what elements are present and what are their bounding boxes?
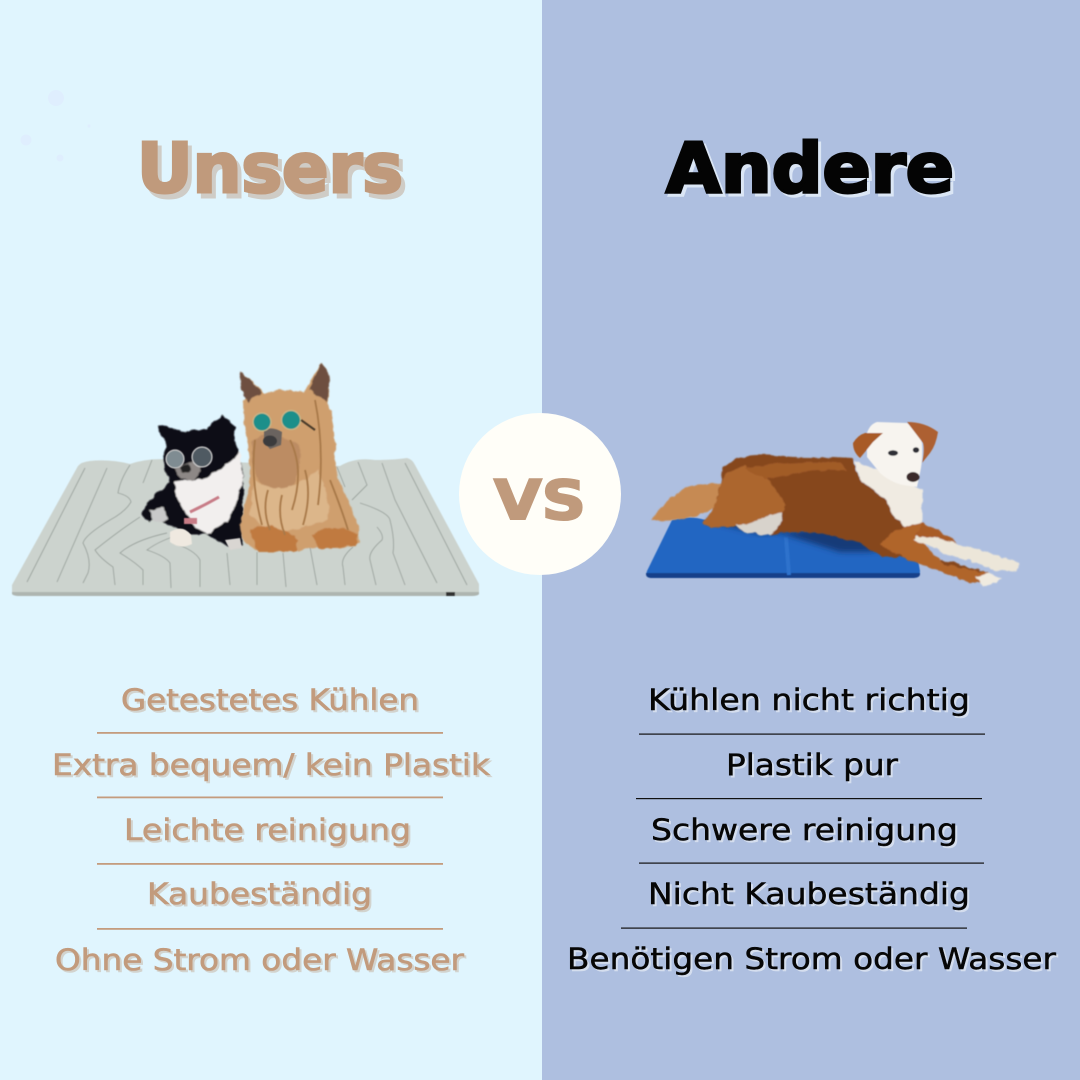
icon: VS circle bbox=[459, 413, 621, 575]
item: Benötigen Strom oder Wasser: Benötigen Strom oder Wasser bbox=[567, 942, 1056, 976]
item: Extra bequem / kein Plastik: Extra bequem/ kein Plastik bbox=[52, 748, 490, 782]
list: Andere drawbacks bbox=[567, 683, 1058, 978]
illustration: blue cooling mat with brown dog bbox=[646, 422, 1020, 587]
chihuahua details: sunglasses, collar and paws bbox=[166, 447, 242, 550]
brown dog head bbox=[853, 422, 938, 487]
item: Kühlen nicht richtig: Kühlen nicht richtig bbox=[648, 683, 970, 717]
item: Leichte reinigung: Leichte reinigung bbox=[126, 815, 413, 849]
item: Kaubeständig: Kaubeständig bbox=[149, 879, 374, 913]
dog: yorkshire terrier bbox=[239, 363, 359, 552]
title: Andere: Andere bbox=[666, 129, 954, 209]
blue gel mat bbox=[646, 515, 920, 578]
panel: right background bbox=[542, 0, 1080, 1080]
item: Kaubeständig: Kaubeständig bbox=[147, 877, 372, 911]
item: Benötigen Strom oder Wasser: Benötigen Strom oder Wasser bbox=[569, 944, 1058, 978]
item: Ohne Strom oder Wasser: Ohne Strom oder Wasser bbox=[57, 945, 466, 979]
item: Kühlen nicht richtig: Kühlen nicht richtig bbox=[650, 685, 972, 719]
item: Extra bequem / kein Plastik: Extra bequem/ kein Plastik bbox=[54, 750, 492, 784]
item: Nicht Kaubeständig: Nicht Kaubeständig bbox=[650, 879, 972, 913]
item: Leichte reinigung: Leichte reinigung bbox=[124, 813, 411, 847]
panel: left background bbox=[0, 0, 542, 1080]
title: Unsers: Unsers bbox=[137, 129, 403, 209]
item: Getestetes Kühlen: Getestetes Kühlen bbox=[121, 683, 419, 717]
brown dog bbox=[650, 454, 1020, 587]
title: Unsers: Unsers bbox=[141, 134, 407, 214]
item: Getestetes Kühlen: Getestetes Kühlen bbox=[123, 685, 421, 719]
illustration: grey cooling mat with two dogs bbox=[12, 363, 479, 596]
decorative bubbles bbox=[20, 90, 91, 162]
item: Schwere reinigung: Schwere reinigung bbox=[653, 815, 960, 849]
item: Ohne Strom oder Wasser: Ohne Strom oder Wasser bbox=[55, 943, 464, 977]
item: Plastik pur: Plastik pur bbox=[726, 748, 898, 782]
item: Schwere reinigung: Schwere reinigung bbox=[651, 813, 958, 847]
item: Plastik pur: Plastik pur bbox=[728, 750, 900, 784]
list: Unsers benefits bbox=[52, 683, 492, 979]
yorkshire terrier details: fur strands, snout and green sunglasses bbox=[253, 400, 348, 535]
title: Andere: Andere bbox=[669, 132, 957, 212]
item: Nicht Kaubeständig: Nicht Kaubeständig bbox=[648, 877, 970, 911]
dog: black and white chihuahua bbox=[142, 415, 243, 548]
grey quilted mat bbox=[12, 458, 479, 596]
icon: VS circle: VS bbox=[494, 469, 586, 532]
